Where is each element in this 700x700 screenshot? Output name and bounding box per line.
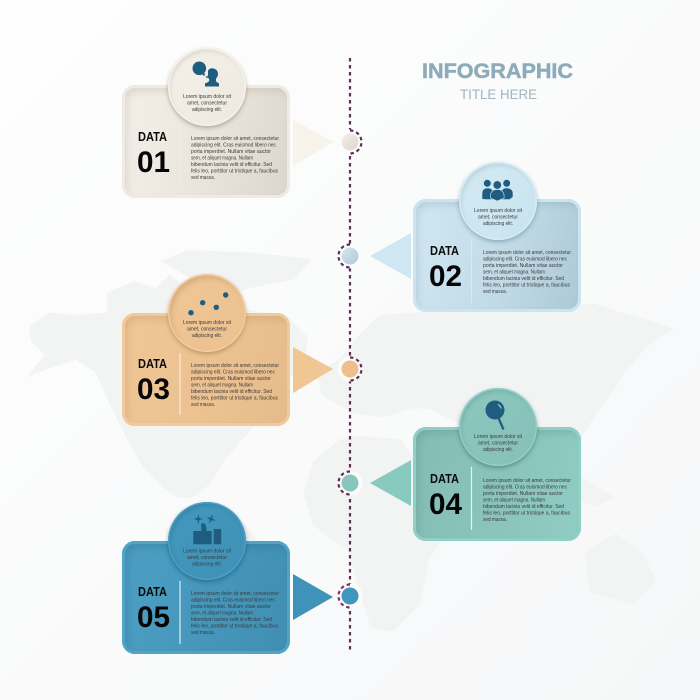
card 05: felis leo, porttitor ut tristique a, faucibus bbox=[191, 624, 278, 630]
card 04: 04 bbox=[429, 488, 462, 521]
circle 02 with people icon: adipiscing elit. bbox=[483, 221, 513, 227]
card 04: Lorem ipsum dolor sit amet, consectetur bbox=[483, 478, 571, 484]
card 05: porta imperdiet. Nullam vitae auctor bbox=[191, 604, 271, 610]
arrow 05 bbox=[293, 574, 333, 620]
title bbox=[422, 59, 573, 102]
card 05: 05 bbox=[137, 601, 170, 634]
card 02: sem, et aliquet magna. Nullam bbox=[483, 270, 545, 276]
card 03: sed massa. bbox=[191, 402, 215, 408]
circle 04 with magnifier icon: adipiscing elit. bbox=[483, 447, 513, 453]
circle 05 with thumbs-up icon: amet, consectetur bbox=[187, 555, 227, 561]
title: INFOGRAPHIC bbox=[422, 59, 573, 83]
card 01: DATA bbox=[138, 130, 167, 144]
panel: data 03 bbox=[122, 274, 333, 426]
icon: magnifier bbox=[486, 400, 504, 430]
card 04 bbox=[413, 427, 581, 541]
circle 03 with dots icon: adipiscing elit. bbox=[192, 333, 222, 339]
arrow 04 bbox=[370, 460, 411, 506]
icon: people bbox=[482, 180, 513, 201]
icon: scattered dots bbox=[188, 292, 228, 315]
circle 03 with dots icon bbox=[168, 274, 246, 352]
timeline with nodes bbox=[338, 58, 362, 650]
card 02: Lorem ipsum dolor sit amet, consectetur bbox=[483, 250, 571, 256]
card 04: sed massa. bbox=[483, 517, 507, 523]
card 04: bibendum lacinia velit id efficitur. Sed bbox=[483, 504, 564, 510]
card 03: sem, et aliquet magna. Nullam bbox=[191, 382, 253, 388]
node 04 bbox=[338, 470, 362, 496]
card 02: adipiscing elit. Cras euismod libero nec bbox=[483, 256, 567, 262]
card 02: 02 bbox=[429, 260, 462, 293]
card 02: DATA bbox=[430, 244, 459, 258]
card 02: bibendum lacinia velit id efficitur. Sed bbox=[483, 276, 564, 282]
card 04: sem, et aliquet magna. Nullam bbox=[483, 498, 545, 504]
icon: thumbs up with stars bbox=[193, 513, 221, 544]
circle 04 with magnifier icon: amet, consectetur bbox=[478, 440, 518, 446]
card 01: sed massa. bbox=[191, 175, 215, 181]
panel: data 05 bbox=[122, 501, 333, 654]
node 05 bbox=[338, 584, 362, 608]
card 05: bibendum lacinia velit id efficitur. Sed bbox=[191, 617, 272, 623]
card 01: sem, et aliquet magna. Nullam bbox=[191, 156, 253, 162]
card 01: Lorem ipsum dolor sit amet, consectetur bbox=[191, 136, 279, 142]
title: TITLE HERE bbox=[460, 87, 537, 102]
card 03 bbox=[122, 313, 290, 426]
circle 04 with magnifier icon bbox=[459, 388, 537, 466]
card 04: felis leo, porttitor ut tristique a, faucibus bbox=[483, 510, 570, 516]
circle 04 with magnifier icon: Lorem ipsum dolor sit bbox=[474, 434, 522, 440]
card 03: 03 bbox=[137, 373, 170, 406]
circle 05 with thumbs-up icon: adipiscing elit. bbox=[192, 562, 222, 568]
card 04: porta imperdiet. Nullam vitae auctor bbox=[483, 491, 563, 497]
circle 01 with speech icon: adipiscing elit. bbox=[192, 107, 222, 113]
card 05: adipiscing elit. Cras euismod libero nec bbox=[191, 598, 275, 604]
circle 03 with dots icon: Lorem ipsum dolor sit bbox=[183, 320, 231, 326]
card 03: adipiscing elit. Cras euismod libero nec bbox=[191, 370, 275, 376]
panel: data 01 bbox=[122, 48, 332, 198]
circle 01 with speech icon: Lorem ipsum dolor sit bbox=[183, 94, 231, 100]
arrow 02 bbox=[370, 233, 411, 279]
card 02 bbox=[413, 199, 581, 312]
node 01 bbox=[338, 130, 362, 154]
circle 02 with people icon: amet, consectetur bbox=[478, 214, 518, 220]
card 02: felis leo, porttitor ut tristique a, faucibus bbox=[483, 282, 570, 288]
card 01 bbox=[122, 85, 290, 198]
card 01: felis leo, porttitor ut tristique a, faucibus bbox=[191, 168, 278, 174]
card 02: sed massa. bbox=[483, 289, 507, 295]
card 05: Lorem ipsum dolor sit amet, consectetur bbox=[191, 591, 279, 597]
panel: data 04 bbox=[370, 387, 581, 541]
card 04: DATA bbox=[430, 472, 459, 486]
card 03: felis leo, porttitor ut tristique a, faucibus bbox=[191, 396, 278, 402]
card 03: Lorem ipsum dolor sit amet, consectetur bbox=[191, 363, 279, 369]
node 03 bbox=[338, 356, 362, 382]
card 01: adipiscing elit. Cras euismod libero nec bbox=[191, 142, 276, 148]
card 03: bibendum lacinia velit id efficitur. Sed bbox=[191, 389, 272, 395]
circle 05 with thumbs-up icon bbox=[168, 502, 246, 580]
card 02: porta imperdiet. Nullam vitae auctor bbox=[483, 263, 563, 269]
card 05: sem, et aliquet magna. Nullam bbox=[191, 610, 253, 616]
circle 02 with people icon: Lorem ipsum dolor sit bbox=[474, 208, 522, 214]
card 01: bibendum lacinia velit id efficitur. Sed bbox=[191, 162, 272, 168]
icon: speech bubble and head bbox=[192, 62, 219, 86]
circle 01 with speech icon: amet, consectetur bbox=[187, 100, 227, 106]
circle 01 with speech icon bbox=[168, 48, 246, 126]
panel: data 02 bbox=[370, 162, 581, 312]
card 01: porta imperdiet. Nullam vitae auctor bbox=[191, 149, 271, 155]
card 04: adipiscing elit. Cras euismod libero nec bbox=[483, 484, 567, 490]
circle 03 with dots icon: amet, consectetur bbox=[187, 326, 227, 332]
card 03: porta imperdiet. Nullam vitae auctor bbox=[191, 376, 271, 382]
card 01: 01 bbox=[137, 146, 170, 179]
arrow 03 bbox=[293, 347, 333, 393]
card 03: DATA bbox=[138, 357, 167, 371]
card 05: sed massa. bbox=[191, 630, 215, 636]
card 05 bbox=[122, 541, 290, 654]
card 05: DATA bbox=[138, 585, 167, 599]
node 02 bbox=[338, 244, 362, 268]
circle 05 with thumbs-up icon: Lorem ipsum dolor sit bbox=[183, 548, 231, 554]
circle 02 with people icon bbox=[459, 162, 537, 240]
arrow 01 bbox=[293, 120, 332, 166]
